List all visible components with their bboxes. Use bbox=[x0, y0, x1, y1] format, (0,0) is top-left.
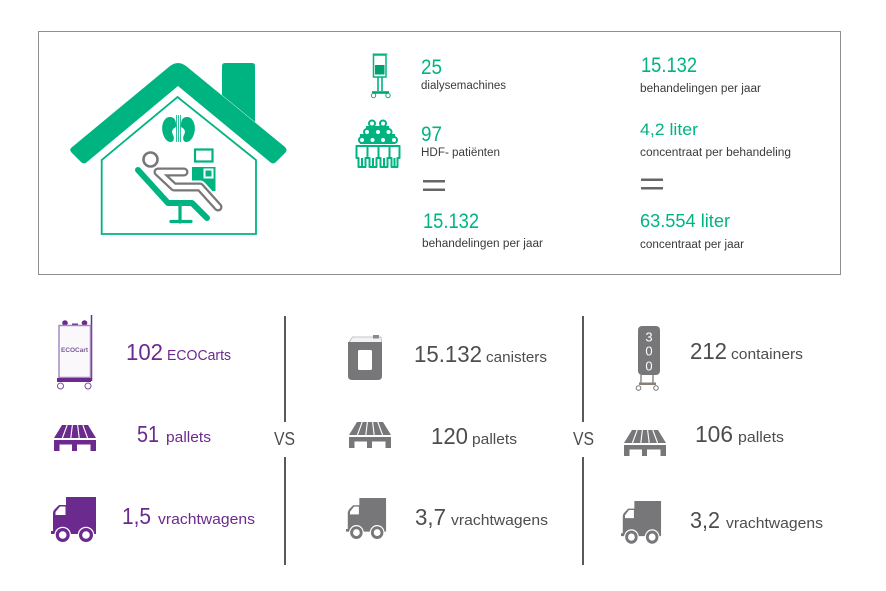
text: 106 pallets bbox=[695, 421, 784, 447]
text: 51 pallets: pallets bbox=[166, 429, 211, 446]
icon: truck grey middle bbox=[346, 498, 386, 540]
text: 1,5 vrachtwagens: 1,5 bbox=[122, 503, 151, 529]
text: 3,7 vrachtwagens: vrachtwagens bbox=[451, 512, 548, 529]
panel: ECOCart column bbox=[51, 315, 255, 543]
icon: group of patients bbox=[356, 120, 400, 167]
text: 106 pallets: pallets bbox=[738, 429, 784, 446]
text: 102 ECOCarts: ECOCarts bbox=[167, 347, 231, 364]
text: 51 pallets bbox=[137, 421, 211, 447]
text: 3,2 vrachtwagens: 3,2 bbox=[690, 507, 720, 533]
divider: VS right: VS bbox=[573, 429, 594, 449]
text: 106 pallets: 106 bbox=[695, 421, 733, 447]
text: 15.132 canisters: canisters bbox=[486, 349, 547, 366]
text: 15.132 behandelingen per jaar left bbox=[422, 210, 543, 250]
panel: home dialysis summary bbox=[38, 32, 840, 274]
icon: 300 container: 3 bbox=[645, 330, 653, 344]
text: 97 HDF-patiënten: 97 bbox=[421, 123, 442, 146]
text: 102 ECOCarts: 102 bbox=[126, 339, 163, 365]
icon: 300 container: 0 bbox=[645, 358, 653, 374]
icon: equals sign right bbox=[641, 178, 663, 190]
text: 120 pallets bbox=[431, 423, 517, 449]
text: 63.554 liter concentraat per jaar: concentraat per jaar bbox=[640, 239, 744, 251]
icon: pallet grey bbox=[349, 422, 391, 448]
icon: 300 container bbox=[636, 326, 660, 390]
text: 63.554 liter concentraat per jaar bbox=[640, 211, 744, 251]
icon: pallet purple bbox=[54, 425, 96, 451]
icon: truck purple bbox=[51, 497, 96, 543]
text: 212 containers: 212 bbox=[690, 338, 727, 364]
icon: dialysis machine bbox=[371, 54, 390, 98]
text: 4,2 liter concentraat per behandeling bbox=[640, 120, 791, 159]
text: 15.132 canisters: 15.132 bbox=[414, 341, 482, 367]
icon: pallet grey right bbox=[624, 430, 666, 456]
panel: canister column bbox=[346, 335, 548, 540]
text: 1,5 vrachtwagens bbox=[122, 503, 255, 529]
text: 3,7 vrachtwagens bbox=[415, 504, 548, 530]
text: 97 HDF-patiënten: HDF- patiënten bbox=[421, 147, 500, 159]
icon: house with patient in dialysis chair bbox=[70, 63, 286, 234]
icon: 300 container: 0 bbox=[645, 344, 653, 358]
text: 15.132 canisters bbox=[414, 341, 547, 367]
text: 1,5 vrachtwagens: vrachtwagens bbox=[158, 511, 255, 528]
text: 120 pallets: 120 bbox=[431, 423, 468, 449]
text: 212 containers: containers bbox=[731, 346, 803, 363]
text: 15.132 behandelingen per jaar right: behandelingen per jaar bbox=[640, 83, 761, 95]
text: 63.554 liter concentraat per jaar: 63.554 liter bbox=[640, 211, 730, 231]
text: 15.132 behandelingen per jaar left: 15.132 bbox=[423, 210, 479, 233]
text: 102 ECOCarts bbox=[126, 339, 231, 365]
panel: container column bbox=[621, 326, 823, 545]
text: 3,2 vrachtwagens: vrachtwagens bbox=[726, 515, 823, 532]
text: 15.132 behandelingen per jaar right: 15.132 bbox=[641, 54, 697, 77]
text: 25 dialysemachines: 25 bbox=[421, 56, 442, 79]
text: 4,2 liter concentraat per behandeling: 4,2 liter bbox=[640, 120, 698, 139]
icon: canister bbox=[348, 335, 382, 380]
icon: truck grey right bbox=[621, 501, 661, 545]
text: 4,2 liter concentraat per behandeling: concentraat per behandeling bbox=[640, 147, 791, 159]
icon: ECOCart bbox=[57, 315, 92, 389]
text: 51 pallets: 51 bbox=[137, 421, 159, 447]
text: 97 HDF-patiënten bbox=[421, 123, 500, 159]
text: 15.132 behandelingen per jaar left: behandelingen per jaar bbox=[422, 238, 543, 250]
icon: equals sign left bbox=[423, 180, 445, 191]
text: 25 dialysemachines: dialysemachines bbox=[421, 80, 506, 92]
text: 3,7 vrachtwagens: 3,7 bbox=[415, 504, 446, 530]
text: 15.132 behandelingen per jaar right bbox=[640, 54, 761, 95]
text: 3,2 vrachtwagens bbox=[690, 507, 823, 533]
text: 25 dialysemachines bbox=[421, 56, 506, 92]
text: 120 pallets: pallets bbox=[472, 431, 517, 448]
divider: VS left: VS bbox=[274, 429, 295, 449]
text: 212 containers bbox=[690, 338, 803, 364]
icon: ECOCart: ECOCart bbox=[61, 347, 89, 354]
